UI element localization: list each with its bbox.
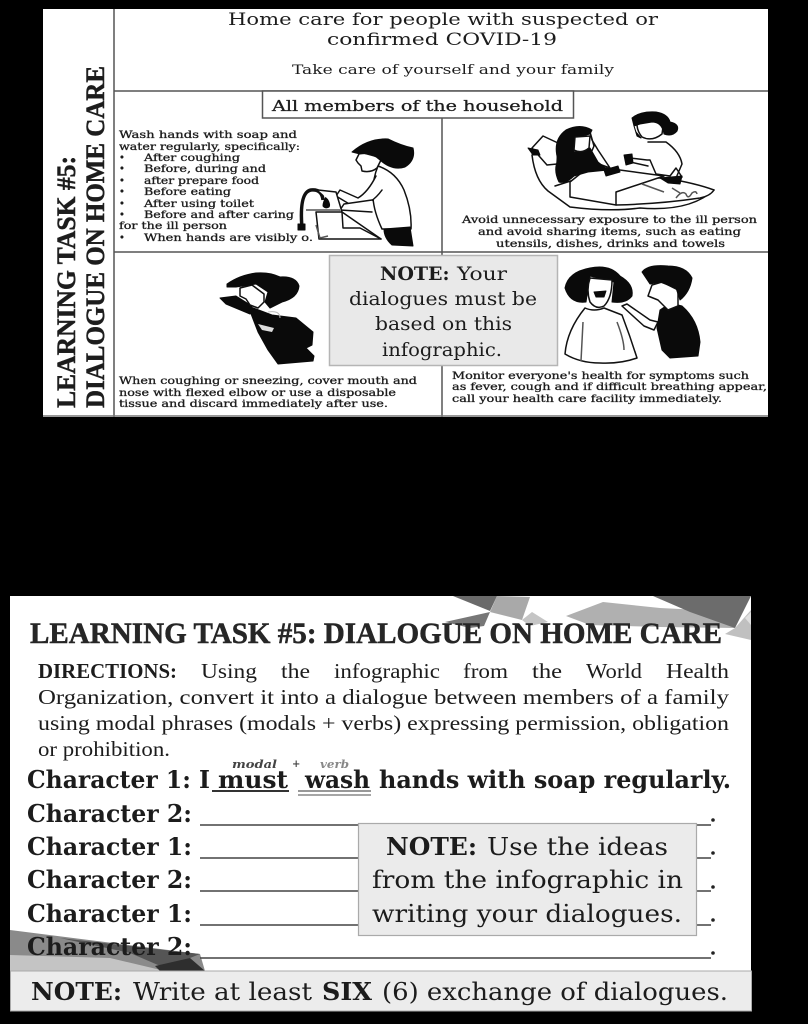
text block: hand washing: • bbox=[119, 176, 125, 187]
modal and verb annotation bbox=[232, 757, 349, 771]
note box: dialogues: based on this bbox=[375, 313, 512, 335]
text block: hand washing: • bbox=[119, 210, 125, 221]
text block: hand washing: • bbox=[119, 164, 125, 175]
panel: dialogue worksheet bbox=[10, 596, 752, 1011]
vertical side title: LEARNING TASK #5: bbox=[52, 156, 81, 408]
dialogue lines to fill in: Character 2: bbox=[27, 799, 192, 828]
directions text bbox=[38, 659, 730, 761]
dialogue lines to fill in bbox=[27, 799, 715, 961]
example dialogue line: must bbox=[218, 765, 288, 794]
directions text: Using bbox=[201, 659, 258, 683]
directions text: World bbox=[586, 659, 643, 683]
directions text: from bbox=[463, 659, 508, 683]
bottom note bar bbox=[10, 971, 752, 1011]
infographic heading: Home care for people with suspected or bbox=[228, 10, 659, 30]
note box: dialogues: Your bbox=[456, 263, 508, 285]
note box: use the ideas: from the infographic in bbox=[372, 866, 683, 894]
directions text: using modal phrases (modals + verbs) expressing permission, obligation bbox=[38, 711, 730, 735]
text block: hand washing: • bbox=[119, 233, 125, 244]
household label box: All members of the household bbox=[271, 97, 564, 115]
directions text: Health bbox=[666, 659, 730, 683]
decorative polygons bottom left bbox=[10, 930, 205, 971]
text block: hand washing: • bbox=[119, 199, 125, 210]
text block: hand washing: After using toilet bbox=[143, 199, 254, 210]
example dialogue line: hands with soap regularly. bbox=[379, 765, 731, 794]
icon: caregiver and ill person in bed bbox=[528, 112, 714, 210]
note box: use the ideas: NOTE: bbox=[386, 832, 477, 861]
subheading: Take care of yourself and your family bbox=[292, 63, 615, 78]
text block: hand washing: Before and after caring bbox=[144, 210, 295, 221]
directions text: Organization, convert it into a dialogue between members of a family bbox=[38, 685, 730, 709]
modal and verb annotation: verb bbox=[320, 757, 349, 771]
example dialogue line: wash bbox=[304, 765, 370, 794]
text block: hand washing: Wash hands with soap and bbox=[119, 130, 298, 141]
note box: dialogues: NOTE: bbox=[380, 263, 450, 285]
modal and verb annotation: modal bbox=[232, 757, 278, 771]
bottom note bar: Write at least bbox=[133, 978, 312, 1006]
infographic heading bbox=[228, 10, 659, 50]
directions text: the bbox=[532, 659, 562, 683]
text block: hand washing: water regularly, specifically: bbox=[119, 142, 300, 153]
text block: hand washing: after prepare food bbox=[144, 176, 260, 187]
text block: monitor health: as fever, cough and if difficult breathing appear, bbox=[452, 382, 767, 393]
directions text: infographic bbox=[334, 659, 440, 683]
example dialogue line bbox=[27, 765, 731, 795]
text block: cover coughs: When coughing or sneezing, cover mouth and bbox=[119, 376, 418, 387]
text block: cover coughs: tissue and discard immediately after use. bbox=[119, 399, 388, 410]
text block: hand washing: Before eating bbox=[144, 187, 232, 198]
bottom note bar: NOTE: bbox=[31, 977, 122, 1006]
decorative polygons top right bbox=[445, 596, 751, 640]
bottom note bar: SIX bbox=[322, 977, 372, 1006]
directions text: or prohibition. bbox=[38, 737, 170, 761]
vertical side title bbox=[52, 66, 110, 408]
icon: woman coughing into elbow bbox=[220, 273, 314, 364]
dialogue lines to fill in: Character 1: bbox=[27, 899, 192, 928]
dialogue lines to fill in: Character 2: bbox=[27, 932, 192, 961]
text block: hand washing: • bbox=[119, 153, 125, 164]
text block: avoid exposure: Avoid unnecessary exposure to the ill person bbox=[461, 215, 758, 226]
text block: hand washing bbox=[119, 130, 313, 244]
note box: dialogues bbox=[330, 256, 558, 366]
bottom note bar: (6) exchange of dialogues. bbox=[382, 978, 728, 1006]
icon: checking ill person's temperature bbox=[565, 266, 700, 363]
text block: monitor health: Monitor everyone's health for symptoms such bbox=[452, 371, 750, 382]
text block: cover coughs: nose with flexed elbow or use a disposable bbox=[119, 388, 396, 399]
dialogue lines to fill in: Character 1: bbox=[27, 832, 192, 861]
text block: avoid exposure bbox=[461, 215, 758, 250]
note box: use the ideas: writing your dialogues. bbox=[372, 900, 682, 928]
directions text: DIRECTIONS: bbox=[38, 659, 177, 683]
text block: hand washing: When hands are visibly o. bbox=[144, 233, 313, 244]
directions text: the bbox=[281, 659, 310, 683]
dialogue lines to fill in: Character 2: bbox=[27, 865, 192, 894]
infographic heading: confirmed COVID-19 bbox=[327, 30, 557, 50]
note box: dialogues: dialogues must be bbox=[349, 288, 537, 310]
text block: avoid exposure: and avoid sharing items, such as eating bbox=[478, 227, 742, 238]
household label box bbox=[262, 91, 574, 118]
panel: WHO home care infographic bbox=[43, 9, 768, 417]
note box: dialogues: infographic. bbox=[382, 339, 502, 361]
example dialogue line: Character 1: I bbox=[27, 765, 210, 794]
text block: cover coughs bbox=[119, 376, 418, 410]
text block: hand washing: • bbox=[119, 187, 125, 198]
text block: hand washing: After coughing bbox=[143, 153, 241, 164]
text block: avoid exposure: utensils, dishes, drinks and towels bbox=[496, 239, 725, 250]
text block: hand washing: Before, during and bbox=[144, 164, 267, 175]
icon: woman washing hands at sink bbox=[298, 139, 414, 246]
vertical side title: DIALOGUE ON HOME CARE bbox=[81, 66, 110, 408]
note box: use the ideas: Use the ideas bbox=[487, 833, 668, 861]
text block: monitor health: call your health care facility immediately. bbox=[452, 394, 722, 405]
worksheet title: LEARNING TASK #5: DIALOGUE ON HOME CARE bbox=[30, 617, 722, 650]
text block: hand washing: for the ill person bbox=[119, 221, 228, 232]
modal and verb annotation: + bbox=[292, 759, 300, 770]
text block: monitor health bbox=[452, 371, 767, 405]
note box: use the ideas bbox=[358, 824, 696, 936]
